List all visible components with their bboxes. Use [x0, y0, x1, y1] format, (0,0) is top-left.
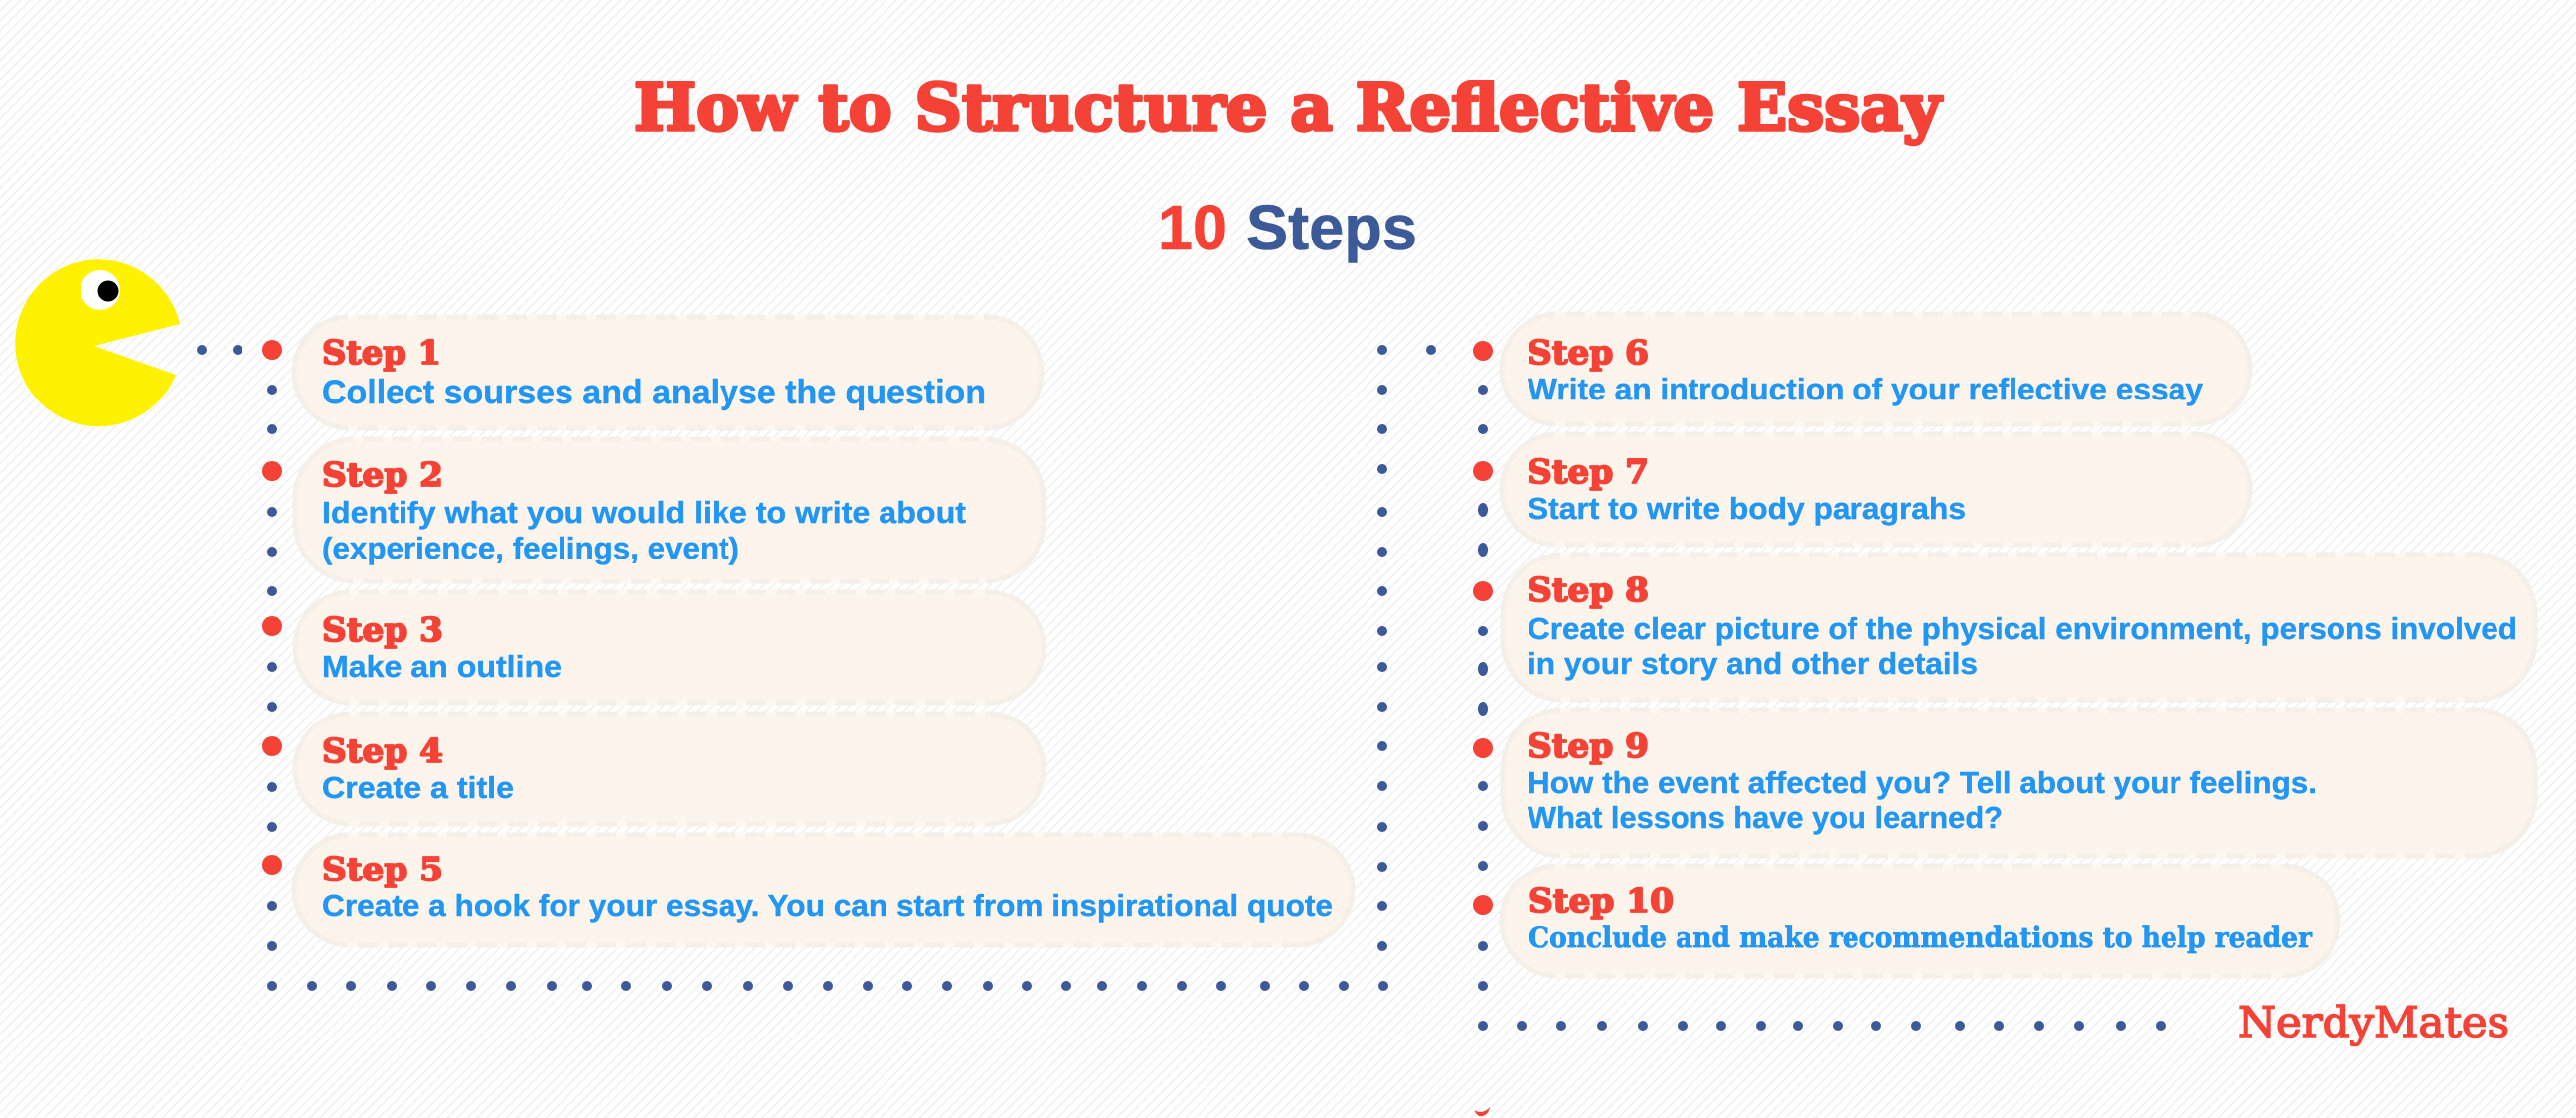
- step 6 panel: [1473, 314, 2250, 424]
- step 9 panel: Step 9: [1528, 726, 1649, 765]
- step 8 panel: [1473, 555, 2535, 700]
- step 5 panel: [262, 835, 1353, 945]
- step 4 panel: [262, 714, 1044, 824]
- step 1 panel: Collect sourses and analyse the question: [322, 374, 986, 411]
- step 9 panel: How the event affected you? Tell about your feelings.: [1528, 765, 2317, 800]
- cropped red dot at bottom edge: [1474, 1107, 1490, 1116]
- step 8 panel: in your story and other details: [1528, 646, 1978, 681]
- title: How to Structure a Reflective Essay: [634, 71, 1943, 146]
- icon: pacman: [15, 259, 180, 426]
- step 5 panel: Step 5: [322, 850, 443, 888]
- step 7 panel: Start to write body paragrahs: [1528, 491, 1966, 526]
- step 10 panel: [1473, 866, 2338, 976]
- step 3 panel: Step 3: [322, 610, 443, 649]
- step 3 panel: [262, 592, 1044, 703]
- subtitle: 10 Steps: Steps: [1246, 192, 1417, 263]
- step 6 panel: Write an introduction of your reflective essay: [1528, 372, 2204, 406]
- subtitle: 10 Steps: 10: [1158, 192, 1227, 263]
- step 7 panel: Step 7: [1528, 452, 1649, 491]
- step 8 panel: Create clear picture of the physical environment, persons involved: [1528, 611, 2517, 646]
- step 2 panel: [262, 439, 1044, 581]
- step 9 panel: What lessons have you learned?: [1528, 800, 2003, 835]
- step 4 panel: Create a title: [322, 770, 514, 805]
- step 10 panel: Conclude and make recommendations to help reader: [1529, 921, 2313, 954]
- step 1 panel: Step 1: [322, 333, 441, 372]
- dotted path: right column: [1426, 345, 2166, 1031]
- step 4 panel: Step 4: [322, 731, 443, 770]
- step 2 panel: Step 2: [322, 455, 443, 494]
- step 8 panel: Step 8: [1528, 570, 1649, 609]
- brand: NerdyMates: NerdyMates: [2238, 998, 2509, 1046]
- step 2 panel: (experience, feelings, event): [322, 531, 739, 565]
- step 5 panel: Create a hook for your essay. You can start from inspirational quote: [322, 888, 1333, 923]
- step 9 panel: [1473, 710, 2535, 856]
- step 10 panel: Step 10: [1529, 881, 1674, 920]
- step 6 panel: Step 6: [1528, 333, 1649, 372]
- subtitle: 10 Steps: [1158, 192, 1417, 263]
- step 1 panel: [262, 317, 1042, 428]
- step 2 panel: Identify what you would like to write about: [322, 495, 966, 530]
- step 3 panel: Make an outline: [322, 649, 562, 684]
- step 7 panel: [1473, 434, 2250, 545]
- dotted path: left column: [197, 345, 1388, 991]
